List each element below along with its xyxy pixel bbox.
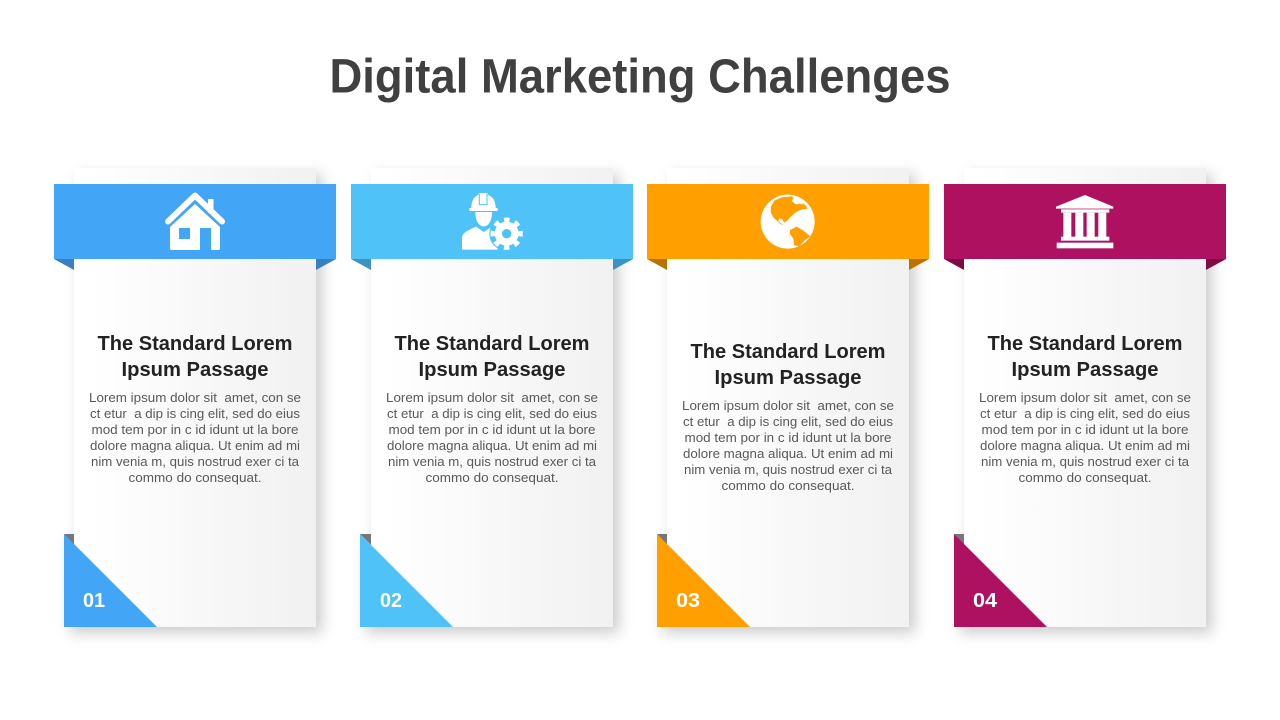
panel: card 04 bbox=[944, 168, 1226, 627]
card body bbox=[64, 168, 316, 627]
body text bbox=[386, 391, 598, 485]
body text: commo do consequat. bbox=[1018, 471, 1152, 485]
body text: Lorem ipsum dolor sit amet, con se bbox=[89, 391, 301, 405]
body text: dolore magna aliqua. Ut enim ad mi bbox=[980, 439, 1190, 453]
heading: The Standard Lorem bbox=[988, 333, 1182, 355]
body text: Lorem ipsum dolor sit amet, con se bbox=[386, 391, 598, 405]
icon: house bbox=[168, 196, 222, 250]
ribbon bbox=[944, 184, 1226, 270]
body text bbox=[89, 391, 301, 485]
ribbon bbox=[54, 184, 336, 270]
card body bbox=[954, 168, 1206, 627]
heading: Ipsum Passage bbox=[714, 367, 862, 389]
body text: mod tem por in c id idunt ut la bore bbox=[92, 423, 299, 437]
body text: nim venia m, quis nostrud exer ci ta bbox=[981, 455, 1189, 469]
number tab bbox=[360, 534, 453, 627]
body text: mod tem por in c id idunt ut la bore bbox=[982, 423, 1189, 437]
number tab bbox=[64, 534, 157, 627]
heading: The Standard Lorem bbox=[394, 333, 590, 355]
body text: ct etur a dip is cing elit, sed do eius bbox=[387, 407, 597, 421]
body text: nim venia m, quis nostrud exer ci ta bbox=[91, 455, 299, 469]
ribbon bbox=[647, 184, 929, 270]
heading: Ipsum Passage bbox=[122, 359, 268, 381]
number tab bbox=[657, 534, 750, 627]
icon: bank building bbox=[1056, 195, 1113, 248]
body text: dolore magna aliqua. Ut enim ad mi bbox=[90, 439, 300, 453]
body text: mod tem por in c id idunt ut la bore bbox=[684, 431, 892, 445]
heading: Ipsum Passage bbox=[418, 359, 566, 381]
number tab bbox=[954, 534, 1047, 627]
title: Digital Marketing Challenges bbox=[330, 50, 950, 104]
body text: commo do consequat. bbox=[128, 471, 262, 485]
body text: ct etur a dip is cing elit, sed do eius bbox=[683, 415, 893, 429]
heading bbox=[394, 333, 590, 381]
number tab: 01 bbox=[83, 590, 105, 612]
body text: nim venia m, quis nostrud exer ci ta bbox=[388, 455, 596, 469]
body text: nim venia m, quis nostrud exer ci ta bbox=[684, 463, 892, 477]
ribbon bbox=[351, 184, 633, 270]
body text: dolore magna aliqua. Ut enim ad mi bbox=[387, 439, 597, 453]
body text: ct etur a dip is cing elit, sed do eius bbox=[980, 407, 1190, 421]
body text: mod tem por in c id idunt ut la bore bbox=[388, 423, 596, 437]
body text bbox=[979, 391, 1191, 485]
number tab: 02 bbox=[380, 590, 402, 612]
icon: globe bbox=[761, 195, 815, 249]
number tab: 04 bbox=[973, 590, 998, 612]
panel: card 03 bbox=[647, 168, 929, 627]
body text bbox=[682, 399, 894, 493]
body text: commo do consequat. bbox=[722, 479, 854, 493]
body text: dolore magna aliqua. Ut enim ad mi bbox=[683, 447, 893, 461]
panel: card 01 bbox=[54, 168, 336, 627]
number tab: 03 bbox=[676, 590, 700, 612]
heading: The Standard Lorem bbox=[690, 341, 886, 363]
icon: worker with gear bbox=[462, 193, 522, 250]
heading bbox=[690, 341, 886, 389]
card body bbox=[360, 168, 613, 627]
body text: Lorem ipsum dolor sit amet, con se bbox=[682, 399, 894, 413]
card body bbox=[657, 168, 909, 627]
heading: The Standard Lorem bbox=[98, 333, 292, 355]
panel: card 02 bbox=[351, 168, 633, 627]
heading bbox=[988, 333, 1182, 381]
body text: ct etur a dip is cing elit, sed do eius bbox=[90, 407, 300, 421]
heading: Ipsum Passage bbox=[1012, 359, 1158, 381]
body text: Lorem ipsum dolor sit amet, con se bbox=[979, 391, 1191, 405]
heading bbox=[98, 333, 292, 381]
body text: commo do consequat. bbox=[426, 471, 558, 485]
